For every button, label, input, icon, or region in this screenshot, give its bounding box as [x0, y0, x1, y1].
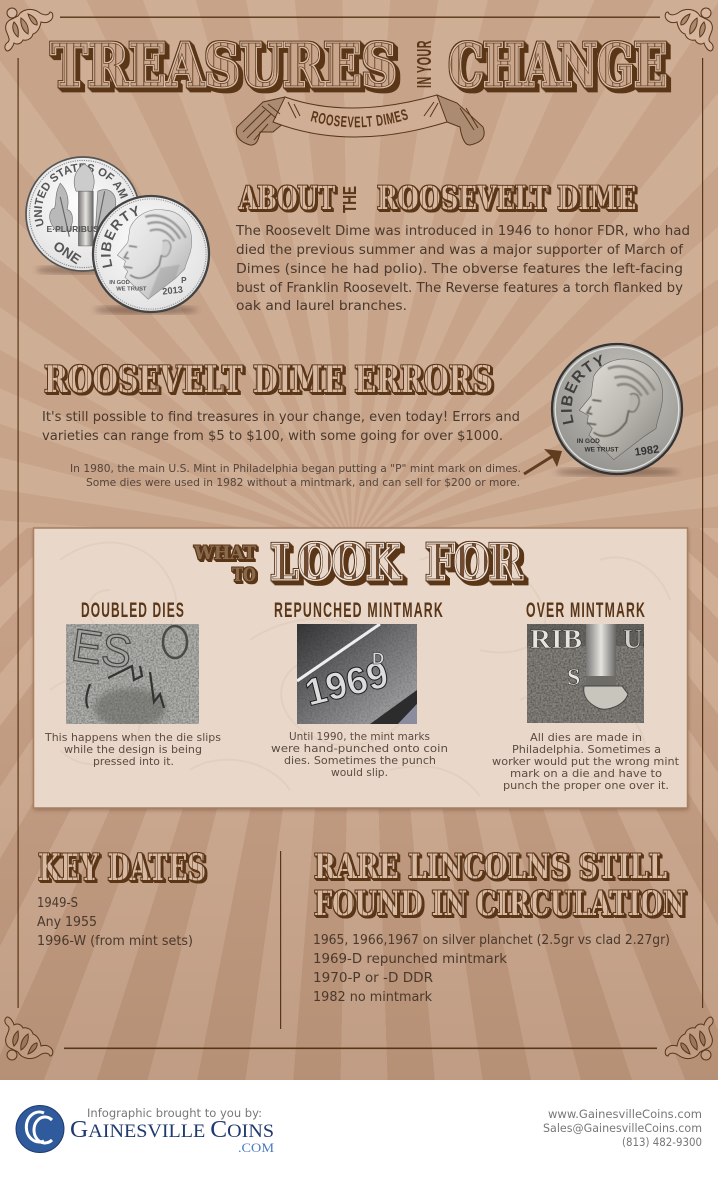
footer: contact	[543, 1107, 702, 1149]
column: over mintmark	[492, 599, 680, 792]
icon: ornament top right	[665, 8, 713, 51]
photo: over mintmark: S	[567, 665, 580, 691]
text block: key dates list: 1949-S	[37, 896, 78, 911]
text block: errors paragraph: varieties can range from $5 to $100, with some going for over $1000.	[42, 429, 503, 444]
icon: 1982 dime: WE TRUST	[585, 446, 618, 453]
icon: ornament bottom right	[665, 1017, 713, 1060]
photo: over mintmark	[527, 624, 644, 723]
icon: ornament top left	[5, 8, 53, 51]
heading: Roosevelt Dime Errors: ROOSEVELT DIME ERRORS	[44, 359, 493, 401]
icon: dime reverse: UNITED STATES OF AME	[34, 163, 128, 227]
footer: contact: www.GainesvilleCoins.com	[548, 1107, 702, 1121]
text block: about paragraph: bust of Franklin Roosevelt. The Reverse features a torch flanked by	[236, 281, 683, 296]
photo: doubled die	[66, 618, 199, 728]
caption: over mintmark: worker would put the wrong mint	[492, 755, 680, 768]
caption: over mintmark: mark on a die and have to	[510, 767, 662, 780]
heading: key dates: KEY DATES	[38, 847, 206, 889]
icon: dime obverse: P	[181, 276, 187, 285]
frame: left rule	[18, 58, 19, 1008]
caption: over mintmark: Philadelphia. Sometimes a	[512, 743, 661, 756]
footer: sponsor: .COM	[238, 1140, 274, 1155]
title: TREASURES	[51, 31, 397, 100]
icon: Gainesville Coins logo	[16, 1106, 64, 1152]
photo: repunched mintmark	[297, 624, 417, 724]
caption: repunched mintmark: were hand-punched onto coin	[271, 742, 448, 755]
heading: About the Roosevelt Dime: ROOSEVELT DIME	[377, 179, 636, 217]
caption: doubled dies	[44, 731, 221, 768]
caption: doubled dies: while the design is being	[64, 743, 202, 756]
column: repunched mintmark: REPUNCHED MINTMARK	[274, 599, 444, 622]
divider: column rule	[280, 851, 281, 1029]
frame: bottom rule	[64, 1048, 657, 1049]
text block: about paragraph	[235, 224, 690, 314]
photo: doubled die: ES	[69, 618, 135, 678]
caption: repunched mintmark: Until 1990, the mint marks	[289, 730, 430, 743]
text block: 1982 no mintmark note	[70, 462, 521, 489]
icon: dime reverse: E·PLURIBUS	[47, 224, 99, 234]
heading: what to look for: FOR	[426, 535, 523, 591]
text block: rare Lincolns list: 1965, 1966,1967 on silver planchet (2.5gr vs clad 2.27gr)	[313, 933, 670, 948]
column: repunched mintmark	[271, 599, 448, 779]
footer: sponsor	[16, 1106, 274, 1155]
heading: rare Lincolns	[314, 847, 686, 924]
photo: repunched mintmark: D	[372, 649, 384, 668]
icon: dime obverse	[92, 194, 210, 314]
heading: what to look for: LOOK	[271, 535, 402, 591]
icon: dime reverse	[25, 156, 138, 272]
text block: 1982 no mintmark note: In 1980, the main U.S. Mint in Philadelphia began putting a "P" mint mark on dimes.	[70, 462, 521, 475]
caption: doubled dies: This happens when the die slips	[44, 731, 221, 744]
text block: errors paragraph	[42, 410, 520, 444]
icon: dime reverse: ONE	[51, 238, 84, 267]
photo: over mintmark: RIB	[530, 624, 582, 654]
heading: About the Roosevelt Dime: ABOUT	[238, 179, 335, 217]
title	[51, 31, 667, 100]
column: doubled dies: DOUBLED DIES	[81, 599, 185, 622]
photo: repunched mintmark: 1969	[301, 654, 393, 715]
title: IN YOUR	[414, 40, 436, 88]
text block: about paragraph: died the previous summer and was a major supporter of March of	[236, 243, 683, 258]
text block: rare Lincolns list: 1969-D repunched mintmark	[313, 952, 507, 967]
text block: rare Lincolns list	[313, 933, 670, 1005]
icon: dime obverse: 2013	[162, 284, 183, 297]
frame: right rule	[702, 58, 703, 1008]
footer: sponsor: GAINESVILLE COINS	[70, 1117, 274, 1143]
caption: over mintmark	[492, 731, 680, 792]
caption: repunched mintmark: would slip.	[331, 766, 388, 779]
icon: 1982 dime: IN GOD	[577, 438, 600, 445]
icon: dime obverse: WE TRUST	[116, 287, 147, 293]
icon: 1982 dime: 1982	[634, 443, 660, 459]
photo: over mintmark: US	[623, 624, 658, 654]
arrow: note to coin	[524, 449, 562, 474]
text block: about paragraph: Dimes (since he had polio). The obverse features the left-facing	[236, 262, 683, 277]
text block: about paragraph: oak and laurel branches.	[236, 299, 407, 314]
heading: what to look for	[193, 535, 523, 591]
caption: doubled dies: pressed into it.	[93, 755, 174, 768]
text block: rare Lincolns list: 1970-P or -D DDR	[313, 971, 433, 986]
icon: 1982 dime	[550, 342, 684, 477]
banner: Roosevelt Dimes: ROOSEVELT DIMES	[310, 109, 408, 128]
text block: key dates list: 1996-W (from mint sets)	[37, 934, 193, 949]
panel: what to look for	[34, 528, 688, 810]
footer: contact: (813) 482-9300	[622, 1135, 702, 1149]
heading: About the Roosevelt Dime: THE	[340, 186, 360, 213]
caption: repunched mintmark: dies. Sometimes the punch	[284, 754, 436, 767]
text block: errors paragraph: It's still possible to find treasures in your change, even today! Errors and	[42, 410, 520, 425]
heading: About the Roosevelt Dime	[238, 179, 636, 217]
footer: contact: Sales@GainesvilleCoins.com	[543, 1121, 702, 1135]
footer: sponsor: Infographic brought to you by:	[87, 1106, 262, 1120]
text block: about paragraph: The Roosevelt Dime was introduced in 1946 to honor FDR, who had	[235, 224, 690, 239]
heading: what to look for: WHAT	[193, 542, 256, 564]
text block: 1982 no mintmark note: Some dies were used in 1982 without a mintmark, and can sell for $200 or more.	[86, 476, 520, 489]
caption: over mintmark: punch the proper one over it.	[503, 779, 669, 792]
column: doubled dies	[44, 599, 221, 768]
icon: ornament bottom left	[5, 1017, 53, 1060]
icon: 1982 dime: LIBERTY	[561, 354, 602, 424]
frame: top rule	[60, 16, 660, 18]
icon: dime obverse: LIBERTY	[101, 206, 138, 268]
text block: key dates list	[37, 896, 193, 949]
icon: dime obverse: IN GOD	[109, 280, 130, 286]
coins: Roosevelt dime reverse and obverse	[25, 156, 210, 315]
heading: what to look for: TO	[232, 564, 256, 586]
text block: key dates list: Any 1955	[37, 915, 97, 930]
text block: rare Lincolns list: 1982 no mintmark	[313, 990, 432, 1005]
banner: Roosevelt Dimes	[236, 94, 485, 146]
caption: repunched mintmark	[271, 730, 448, 779]
caption: over mintmark: All dies are made in	[530, 731, 642, 744]
